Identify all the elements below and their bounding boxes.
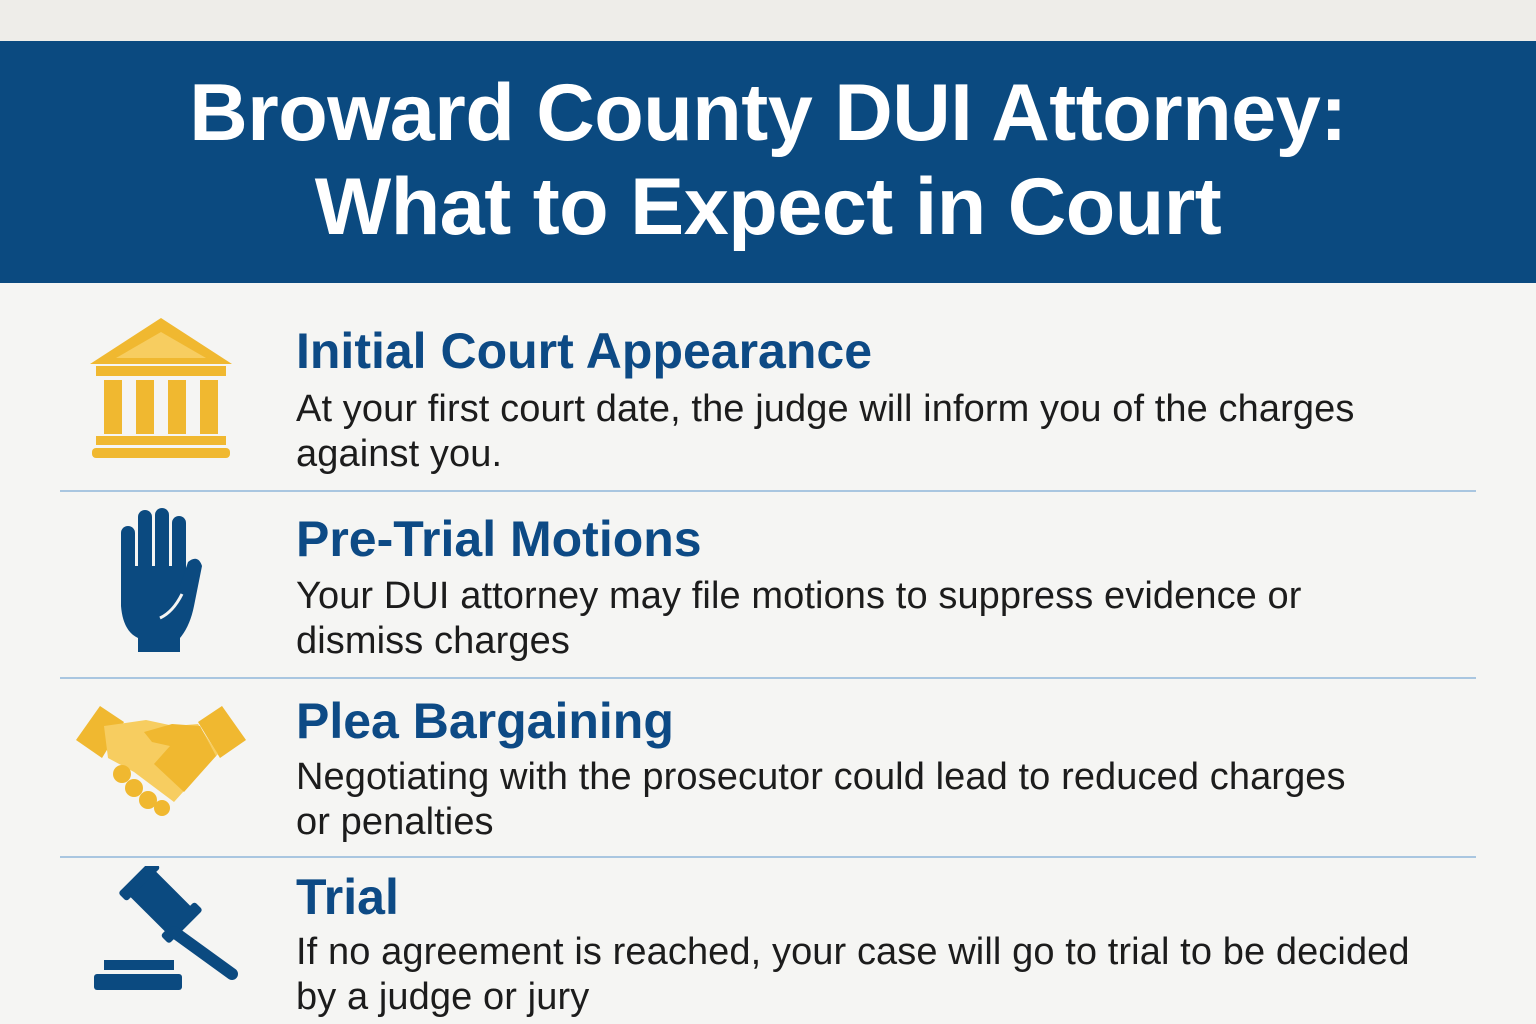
title: Broward County DUI Attorney: bbox=[189, 68, 1347, 158]
text: plea bargaining bbox=[296, 756, 1346, 843]
heading: plea bargaining: Plea Bargaining bbox=[296, 693, 674, 749]
text: trial bbox=[296, 931, 1410, 1018]
icon: raised hand bbox=[121, 508, 202, 652]
text: pre-trial motions bbox=[296, 575, 1302, 662]
text: initial court appearance bbox=[296, 388, 1354, 475]
text: initial court appearance: against you. bbox=[296, 433, 502, 475]
text: pre-trial motions: dismiss charges bbox=[296, 620, 570, 662]
text: pre-trial motions: Your DUI attorney may file motions to suppress evidence or bbox=[296, 575, 1302, 617]
title: What to Expect in Court bbox=[315, 162, 1221, 252]
text: plea bargaining: or penalties bbox=[296, 801, 494, 843]
icon: courthouse bbox=[90, 318, 232, 458]
heading: trial: Trial bbox=[296, 869, 399, 925]
text: plea bargaining: Negotiating with the prosecutor could lead to reduced charges bbox=[296, 756, 1346, 798]
icon: gavel bbox=[94, 866, 238, 990]
heading: pre-trial motions: Pre-Trial Motions bbox=[296, 511, 702, 567]
icon: handshake bbox=[76, 706, 246, 816]
text: trial: If no agreement is reached, your case will go to trial to be decided bbox=[296, 931, 1410, 973]
text: initial court appearance: At your first court date, the judge will inform you of the charges bbox=[296, 388, 1354, 430]
text: trial: by a judge or jury bbox=[296, 976, 589, 1018]
heading: initial court appearance: Initial Court Appearance bbox=[296, 323, 872, 379]
title bbox=[189, 68, 1347, 252]
header banner bbox=[0, 41, 1536, 283]
